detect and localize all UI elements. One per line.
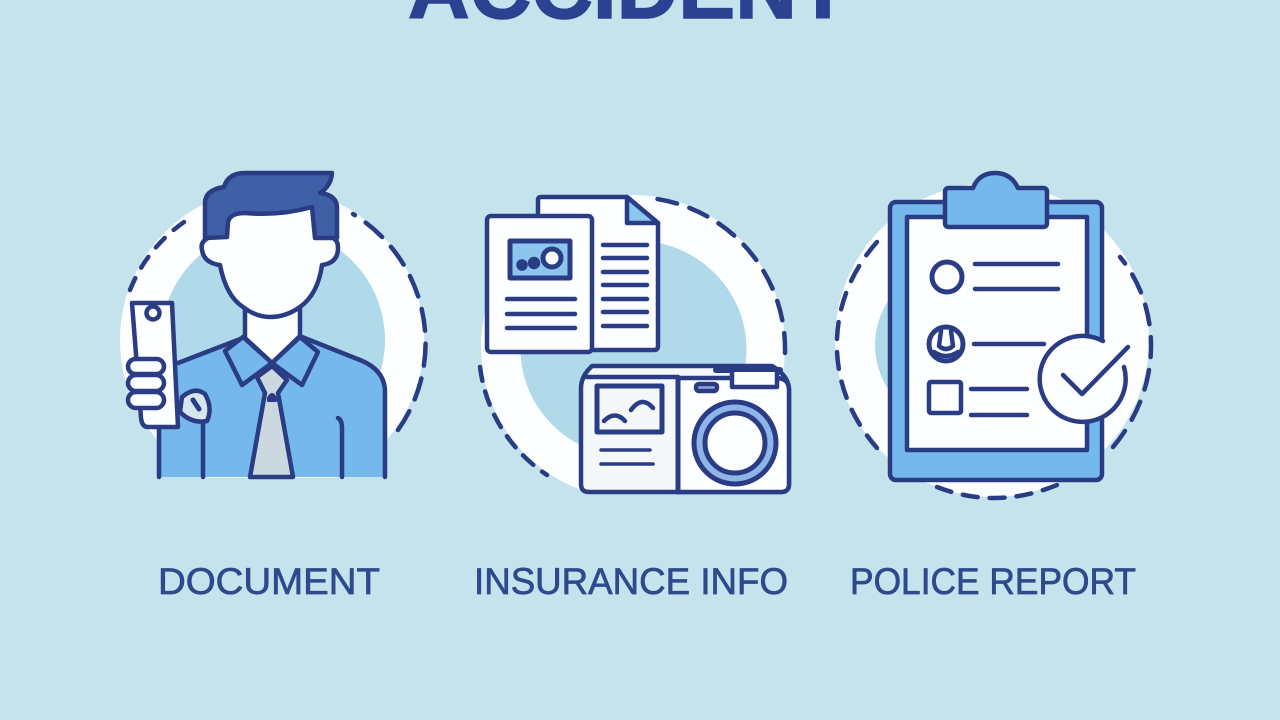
label: police report: POLICE REPORT [850, 561, 1136, 602]
panel: police report [835, 173, 1151, 602]
icon: check mark badge [1040, 336, 1128, 423]
panel: insurance info [474, 195, 789, 602]
label: insurance info: INSURANCE INFO [474, 561, 788, 602]
icon: background circle for person [120, 188, 426, 492]
panel: document [120, 173, 426, 602]
icon: person with phone [128, 173, 385, 477]
label: document: DOCUMENT [158, 561, 380, 602]
icon: background circle for documents [480, 195, 785, 499]
icon: background circle for clipboard [835, 183, 1151, 498]
icon: clipboard [890, 173, 1102, 480]
icon: camera [581, 366, 789, 492]
icon: documents [487, 197, 658, 352]
